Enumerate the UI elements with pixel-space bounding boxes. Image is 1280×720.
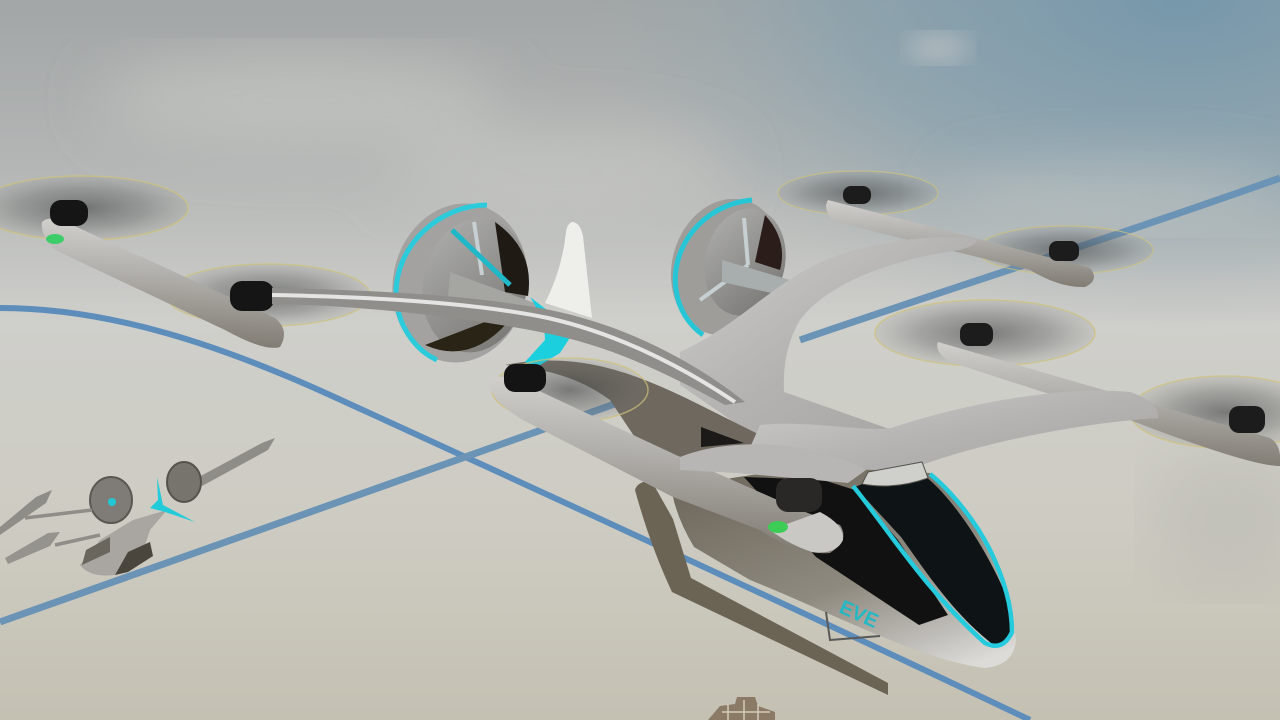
cockpit windscreen <box>855 475 1013 644</box>
rear ducted fan left <box>378 191 542 375</box>
rear ducted fan right <box>656 186 798 348</box>
left thin wing <box>272 288 745 405</box>
fuselage <box>673 470 1016 668</box>
central body hatch <box>701 427 744 447</box>
cyan nose accent <box>853 474 1012 646</box>
front right rotor boom <box>875 300 1280 466</box>
cabin window <box>744 477 948 625</box>
rear wing and central wing surface <box>680 237 976 440</box>
small aircraft tail light <box>150 477 195 522</box>
flight path: blue straight line <box>0 178 1280 622</box>
front boom <box>487 358 866 553</box>
fuselage logo: EVE <box>836 596 881 633</box>
small aircraft left booms <box>0 490 52 535</box>
flight path: blue arc <box>0 308 1030 720</box>
cyan wing root light <box>525 297 573 367</box>
cockpit top sensor <box>862 462 928 486</box>
tail fin <box>545 222 592 318</box>
central body structure <box>505 361 770 470</box>
rear right rotor boom <box>778 171 1153 287</box>
small aircraft rear boom <box>197 438 275 486</box>
landing skid <box>635 480 888 695</box>
front right wing <box>740 391 1158 480</box>
small background aircraft <box>0 438 275 576</box>
left rotor boom <box>0 176 370 348</box>
boom fairing <box>680 444 866 483</box>
distant building <box>708 697 775 720</box>
landing strut <box>826 612 880 640</box>
small aircraft body <box>80 510 167 576</box>
